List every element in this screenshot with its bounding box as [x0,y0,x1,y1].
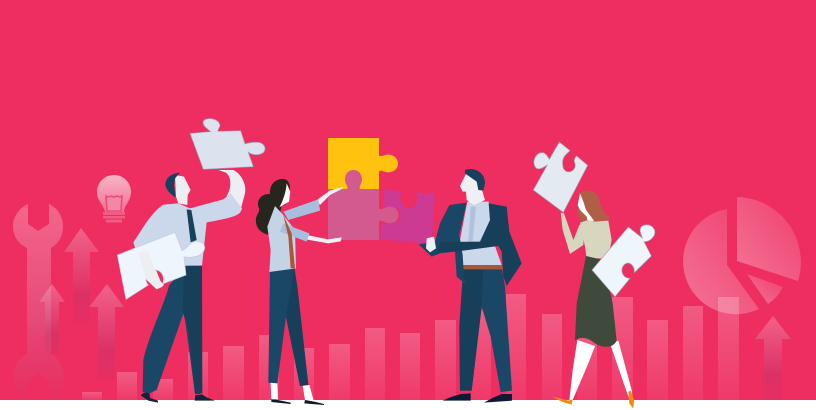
woman: sleeves [280,199,320,242]
man: hair [465,169,485,191]
shirt [133,193,242,266]
neck and face [175,175,191,205]
arm [561,213,585,254]
woman: trousers [268,268,308,386]
bar chart backdrop [82,294,739,400]
puzzle piece raised [190,119,265,169]
hair [165,173,180,197]
figure: woman and central puzzle [256,138,522,405]
man: suit jacket right and arm [437,203,522,286]
figure: man with puzzle pieces [117,119,265,403]
man: trousers [459,267,512,392]
man: hand [426,237,436,252]
puzzle: magenta piece [380,189,435,244]
trousers [143,267,200,394]
icon: wrench [13,204,64,400]
woman: shoes [271,399,324,405]
tie [187,209,197,242]
woman: blouse [267,206,296,272]
puzzle: pink piece [328,170,399,240]
skirt [575,256,617,347]
shoes [552,391,634,409]
legs [569,340,633,401]
forearm left [137,251,163,289]
hand [138,251,164,289]
arm skin raised [218,170,245,209]
blouse [580,220,612,258]
woman: hair back [256,179,290,235]
man: suit jacket left [419,203,467,285]
man: belt [463,265,503,269]
woman: face [279,183,290,207]
puzzle piece raised [533,142,588,212]
puzzle piece carried [117,232,205,299]
woman: arms skin [306,187,343,243]
shoes [141,393,215,403]
man: tie [468,207,476,242]
man: shoes [443,393,512,403]
man: face [460,174,485,205]
hair [578,190,611,222]
face [578,193,594,223]
icon: arrows up [39,228,791,400]
icon: pie chart [683,197,801,314]
puzzle: yellow piece [328,138,398,189]
woman: scarf [283,215,295,268]
figure: woman with puzzle pieces [533,142,655,409]
man: shirt [460,202,502,265]
icon: light bulb [97,175,131,222]
puzzle piece carried [592,225,655,297]
woman: ankles [271,383,314,402]
